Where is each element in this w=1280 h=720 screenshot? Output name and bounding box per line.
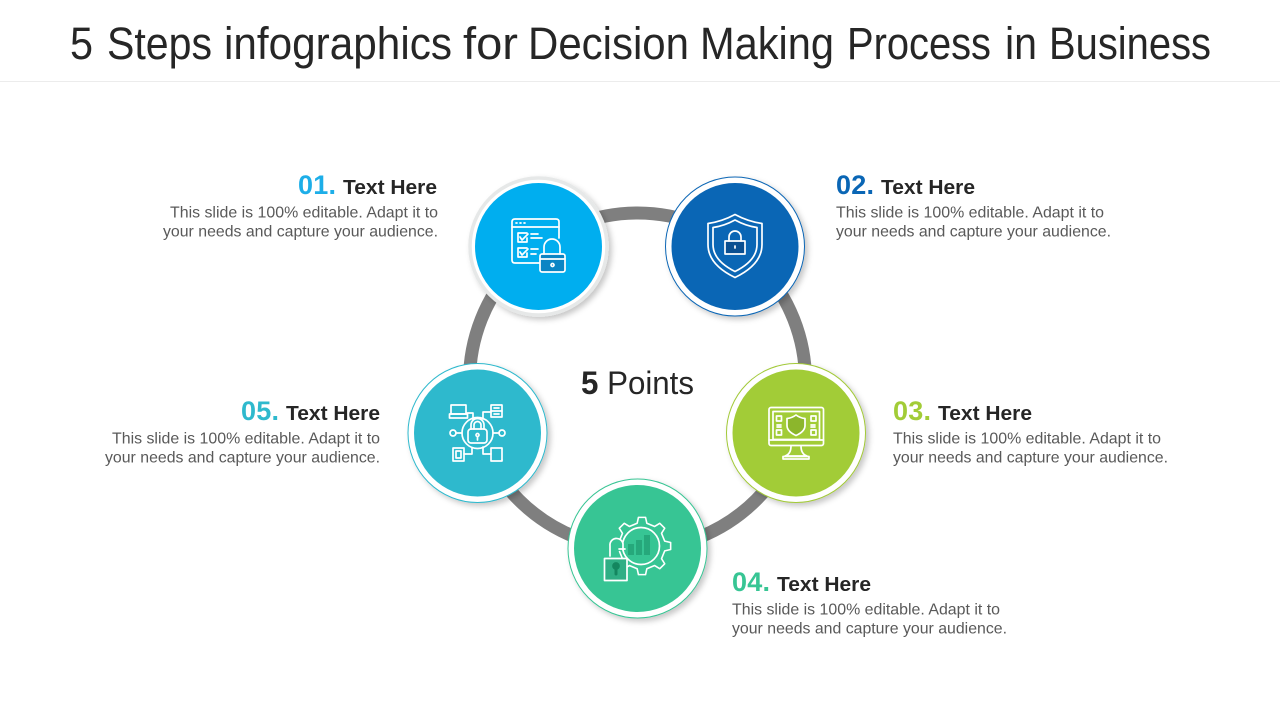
icon: network with lock bbox=[450, 405, 505, 461]
text block 02: 02. bbox=[836, 170, 874, 200]
text block 05 bbox=[105, 396, 380, 466]
gray ring connector bbox=[470, 213, 806, 549]
text block 05: Text Here bbox=[286, 403, 380, 425]
center label: 5 Points bbox=[581, 365, 694, 401]
icon: monitor with shield bbox=[769, 408, 824, 459]
text block 05: 05. bbox=[241, 396, 279, 426]
step 2 circle bbox=[666, 177, 804, 316]
text block 02 bbox=[836, 170, 1111, 240]
text block 02: This slide is 100% editable. Adapt it to bbox=[836, 204, 1104, 222]
text block 03: Text Here bbox=[938, 403, 1032, 425]
step 4 circle bbox=[568, 479, 707, 618]
step 1 circle bbox=[470, 178, 607, 315]
icon: checklist window with lock bbox=[512, 219, 565, 272]
title: Business bbox=[1049, 18, 1211, 69]
step 3 circle bbox=[726, 364, 866, 502]
title bbox=[70, 18, 1211, 69]
icon: shield with lock bbox=[708, 214, 762, 278]
text block 04: Text Here bbox=[777, 574, 871, 596]
title: for bbox=[463, 18, 518, 69]
text block 01: your needs and capture your audience. bbox=[163, 224, 438, 240]
title: Steps bbox=[107, 18, 212, 69]
text block 01: This slide is 100% editable. Adapt it to bbox=[170, 204, 438, 222]
title: infographics bbox=[224, 18, 452, 69]
step 5 circle bbox=[408, 364, 547, 502]
text block 02: Text Here bbox=[881, 177, 975, 199]
text block 04: This slide is 100% editable. Adapt it to bbox=[732, 602, 1000, 618]
title: 5 bbox=[70, 18, 93, 69]
text block 03 bbox=[893, 396, 1168, 466]
text block 04: 04. bbox=[732, 567, 770, 597]
text block 02: your needs and capture your audience. bbox=[836, 224, 1111, 240]
text block 01 bbox=[163, 170, 438, 240]
text block 05: This slide is 100% editable. Adapt it to bbox=[112, 430, 380, 448]
text block 04: your needs and capture your audience. bbox=[732, 620, 1007, 638]
text block 05: your needs and capture your audience. bbox=[105, 450, 380, 466]
title: Process bbox=[847, 18, 991, 69]
text block 03: This slide is 100% editable. Adapt it to bbox=[893, 430, 1161, 448]
title: in bbox=[1005, 18, 1037, 69]
title: Making bbox=[700, 18, 834, 69]
text block 03: 03. bbox=[893, 396, 931, 426]
text block 01: Text Here bbox=[343, 177, 437, 199]
text block 03: your needs and capture your audience. bbox=[893, 450, 1168, 466]
text block 04 bbox=[732, 567, 1007, 638]
title: Decision bbox=[528, 18, 689, 69]
text block 01: 01. bbox=[298, 170, 336, 200]
icon: gear with open lock bbox=[604, 517, 671, 580]
